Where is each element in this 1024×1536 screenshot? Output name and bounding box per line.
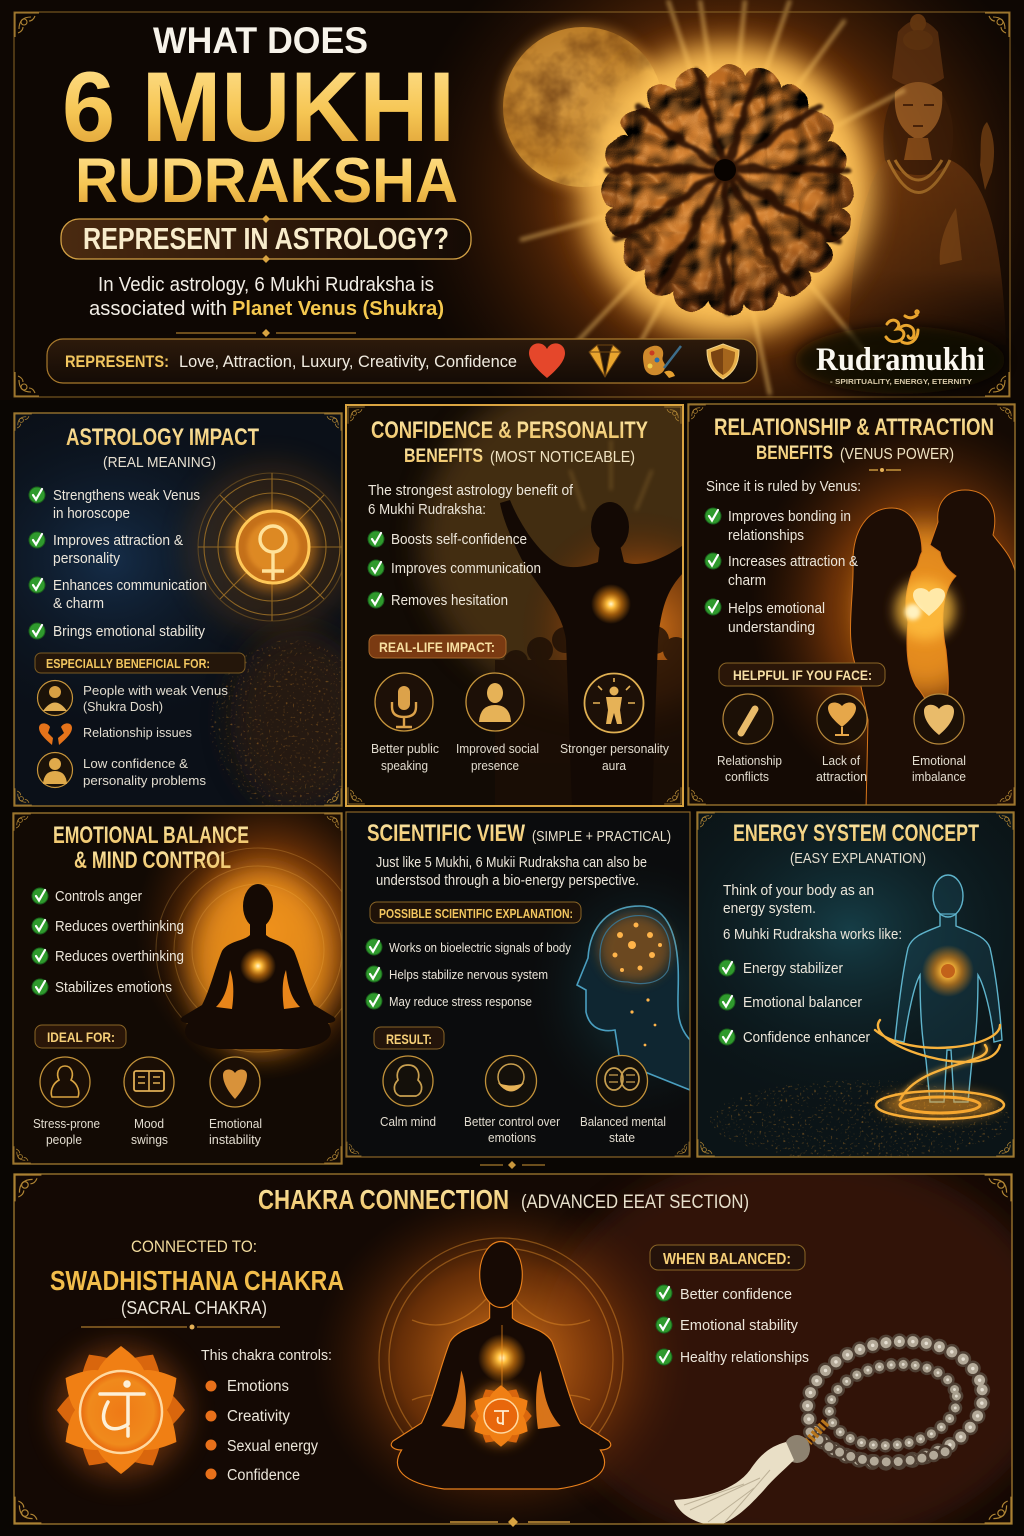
checklist: Improves attraction & <box>53 533 183 549</box>
checklist: Improves communication <box>391 561 541 577</box>
intro text: associated with <box>89 298 227 320</box>
logo <box>795 311 1005 394</box>
bead grooves <box>607 72 847 312</box>
icon: lack of attraction <box>817 694 867 744</box>
checklist: & charm <box>53 596 104 612</box>
panel: relationship and attraction <box>688 404 1024 810</box>
heading: (VENUS POWER) <box>840 446 954 463</box>
audience labels: Mood <box>134 1116 164 1131</box>
checklist: charm <box>728 573 766 589</box>
audience labels: Stress-prone <box>33 1116 100 1131</box>
icon: stress-prone people <box>40 1057 90 1107</box>
chakra name block: (SACRAL CHAKRA) <box>121 1298 267 1318</box>
meditating silhouette <box>181 884 335 1049</box>
energy body figure <box>895 875 1002 1102</box>
heading: & MIND CONTROL <box>74 847 231 874</box>
result labels: Better control over <box>464 1114 561 1129</box>
represents bar: REPRESENTS: <box>65 352 169 371</box>
icon: mood swings <box>124 1057 174 1107</box>
label: result <box>374 1027 444 1049</box>
balanced checklist: Better confidence <box>680 1286 792 1303</box>
label: especially beneficial for: ESPECIALLY BENEFICIAL FOR: <box>46 656 210 671</box>
icon: heart <box>529 343 565 378</box>
checklist: personality <box>53 551 121 567</box>
checklist: Increases attraction & <box>728 554 858 570</box>
intro text <box>89 274 444 320</box>
label: ideal for: IDEAL FOR: <box>47 1029 115 1045</box>
heading <box>714 414 994 464</box>
checklist: Confidence enhancer <box>743 1030 870 1046</box>
audience icons <box>40 1057 260 1107</box>
intro text: The strongest astrology benefit of <box>368 483 574 499</box>
moon <box>501 25 665 189</box>
intro text <box>376 855 647 889</box>
rudraksha bead <box>582 45 872 335</box>
represents bar: Love, Attraction, Luxury, Creativity, Confidence <box>179 352 517 371</box>
checklist <box>719 960 870 1046</box>
problem labels: attraction <box>816 769 867 784</box>
intro text: energy system. <box>723 901 816 917</box>
represents bar <box>47 339 757 383</box>
heading <box>733 820 979 867</box>
heading: (REAL MEANING) <box>103 454 216 471</box>
icon: relationship conflicts <box>723 694 773 744</box>
panel: hero header <box>14 0 1024 400</box>
checklist <box>29 487 207 640</box>
audience list <box>38 680 229 788</box>
checklist: Energy stabilizer <box>743 961 843 977</box>
audience list: People with weak Venus <box>83 683 229 698</box>
chakra controls list: Sexual energy <box>227 1438 318 1455</box>
intro text: Just like 5 Mukhi, 6 Mukii Rudraksha can also be <box>376 855 647 871</box>
checklist <box>32 888 184 996</box>
mala tassel <box>674 1422 826 1526</box>
brain head illustration <box>577 906 690 1090</box>
icon: person with weak Venus <box>38 680 72 716</box>
icon: balanced mental state <box>596 1056 648 1106</box>
checklist: Reduces overthinking <box>55 949 184 965</box>
decorative light rays <box>520 0 905 395</box>
result labels: Calm mind <box>380 1114 436 1129</box>
result labels <box>380 1114 666 1145</box>
label: when balanced <box>650 1245 805 1270</box>
impact labels: aura <box>602 758 627 773</box>
icon: diamond <box>589 345 621 377</box>
audience labels <box>33 1116 262 1147</box>
icon: swadhisthana chakra lotus <box>53 1342 189 1478</box>
checklist: Reduces overthinking <box>55 919 184 935</box>
heading: (SIMPLE + PRACTICAL) <box>532 829 671 845</box>
checklist <box>366 939 571 1009</box>
bead ridges <box>628 90 826 286</box>
intro text: Planet Venus (Shukra) <box>232 298 444 320</box>
icon: emotional imbalance <box>914 694 964 744</box>
label: helpful if you face <box>719 663 885 686</box>
couple silhouette <box>850 490 1016 810</box>
problem icons <box>723 694 964 744</box>
label: real-life impact: REAL-LIFE IMPACT: <box>379 639 495 655</box>
problem labels <box>717 753 966 784</box>
checklist: Removes hesitation <box>391 593 508 609</box>
impact labels: presence <box>471 758 519 773</box>
heading <box>371 417 648 467</box>
checklist: Enhances communication <box>53 578 207 594</box>
intro text <box>723 883 902 943</box>
intro text: 6 Muhki Rudraksha works like: <box>723 927 902 943</box>
checklist <box>368 531 541 609</box>
result icons <box>383 1056 648 1106</box>
audience labels: people <box>46 1132 82 1147</box>
title: WHAT DOES <box>153 20 368 61</box>
logo: Rudramukhi <box>816 342 985 378</box>
heading: BENEFITS <box>756 443 833 464</box>
crowd silhouettes <box>495 626 682 729</box>
goddess Venus figure <box>848 14 1006 345</box>
checklist: Helps emotional <box>728 601 825 617</box>
heading <box>66 424 259 471</box>
checklist: Works on bioelectric signals of body <box>389 940 571 955</box>
heading <box>53 822 249 874</box>
result labels: emotions <box>488 1130 536 1145</box>
checklist: Brings emotional stability <box>53 624 206 640</box>
title <box>66 27 456 202</box>
intro text: In Vedic astrology, 6 Mukhi Rudraksha is <box>98 274 434 296</box>
intro text: Think of your body as an <box>723 883 874 899</box>
panel: confidence and personality <box>345 404 684 807</box>
panel: energy system concept <box>696 811 1015 1158</box>
checklist: relationships <box>728 528 804 544</box>
chakra controls list: Confidence <box>227 1467 300 1484</box>
label: possible scientific explanation <box>370 902 581 923</box>
golden energy swirl <box>875 1020 1004 1119</box>
impact labels: Improved social <box>456 741 539 756</box>
header frame <box>14 12 1010 397</box>
balanced checklist: Healthy relationships <box>680 1349 809 1366</box>
heading: (EASY EXPLANATION) <box>790 850 926 867</box>
panel: astrology impact <box>13 412 343 807</box>
audience labels: swings <box>131 1132 168 1147</box>
icon: relationship issues <box>39 723 72 745</box>
icon: calm mind <box>383 1056 433 1106</box>
audience labels: instability <box>209 1132 261 1147</box>
crystal mala beads <box>800 1330 990 1474</box>
audience labels: Emotional <box>209 1116 262 1131</box>
intro text <box>368 483 574 518</box>
chakra name block <box>50 1237 344 1318</box>
checklist: Stabilizes emotions <box>55 980 172 996</box>
heading: (MOST NOTICEABLE) <box>490 449 635 466</box>
meditating figure with chakra <box>391 1242 611 1489</box>
subtitle pill: REPRESENT IN ASTROLOGY? <box>83 221 449 256</box>
chakra controls list: Emotions <box>227 1378 289 1395</box>
logo: - SPIRITUALITY, ENERGY, ETERNITY <box>830 379 972 386</box>
icon: low confidence <box>38 752 72 788</box>
checklist: Strengthens weak Venus <box>53 488 200 504</box>
zodiac wheel with Venus symbol <box>187 462 357 632</box>
label: helpful if you face: HELPFUL IF YOU FACE: <box>733 667 872 683</box>
panel: chakra connection <box>14 1150 1024 1536</box>
checklist <box>705 508 858 636</box>
checklist: May reduce stress response <box>389 994 532 1009</box>
panel: scientific view <box>345 811 691 1158</box>
checklist: Controls anger <box>55 889 142 905</box>
checklist: understanding <box>728 620 815 636</box>
icon: om <box>886 311 918 343</box>
icon: personality aura <box>584 674 644 732</box>
heading: ASTROLOGY IMPACT <box>66 424 259 451</box>
problem labels: Emotional <box>912 753 966 768</box>
icon: palette <box>643 346 681 378</box>
title: 6 MUKHI <box>62 51 455 162</box>
label: when balanced: WHEN BALANCED: <box>663 1251 791 1268</box>
balanced checklist <box>656 1285 809 1366</box>
halo rings <box>378 1237 624 1434</box>
checklist: Emotional balancer <box>743 995 862 1011</box>
audience list: (Shukra Dosh) <box>83 699 163 714</box>
label: real-life impact <box>369 635 506 658</box>
heading: CHAKRA CONNECTION <box>258 1184 509 1215</box>
result labels: Balanced mental <box>580 1114 666 1129</box>
chakra name block: CONNECTED TO: <box>131 1237 257 1256</box>
impact icons <box>375 673 644 732</box>
checklist: Improves bonding in <box>728 509 851 525</box>
audience list: Low confidence & <box>83 756 188 771</box>
heading: (ADVANCED EEAT SECTION) <box>521 1192 749 1213</box>
icon: control over emotions <box>486 1056 536 1106</box>
label: result: RESULT: <box>386 1031 432 1047</box>
chakra controls list <box>201 1347 332 1484</box>
heading <box>258 1184 749 1215</box>
chakra controls list: Creativity <box>227 1408 290 1425</box>
panel: emotional balance <box>12 812 343 1165</box>
icon: emotional instability <box>210 1057 260 1107</box>
title: RUDRAKSHA <box>75 146 458 216</box>
impact labels: speaking <box>381 758 428 773</box>
heading: EMOTIONAL BALANCE <box>53 822 249 849</box>
icon: social presence <box>466 673 524 731</box>
icon: shield <box>707 344 739 379</box>
impact labels: Better public <box>371 741 439 756</box>
raised-arms silhouette <box>500 500 682 738</box>
icon: microphone <box>375 673 433 731</box>
heading: SCIENTIFIC VIEW <box>367 820 525 847</box>
subtitle pill <box>61 215 471 263</box>
problem labels: Relationship <box>717 753 782 768</box>
checklist: in horoscope <box>53 506 130 522</box>
heading: CONFIDENCE & PERSONALITY <box>371 417 648 444</box>
label: ideal for <box>35 1025 126 1048</box>
heading: BENEFITS <box>404 446 483 467</box>
problem labels: imbalance <box>912 769 966 784</box>
audience list: personality problems <box>83 773 207 788</box>
problem labels: conflicts <box>725 769 769 784</box>
intro text: Since it is ruled by Venus: <box>706 479 861 495</box>
impact labels: Stronger personality <box>560 741 669 756</box>
heading <box>367 820 671 847</box>
result labels: state <box>609 1130 635 1145</box>
balanced checklist: Emotional stability <box>680 1317 798 1334</box>
intro text: understsod through a bio-energy perspective. <box>376 873 639 889</box>
label: possible scientific explanation: POSSIBLE SCIENTIFIC EXPLANATION: <box>379 906 573 921</box>
problem labels: Lack of <box>822 753 860 768</box>
chakra controls list: This chakra controls: <box>201 1347 332 1364</box>
impact labels <box>371 741 669 773</box>
intro text: 6 Mukhi Rudraksha: <box>368 502 486 518</box>
audience list: Relationship issues <box>83 725 192 740</box>
glowing heart <box>895 580 955 640</box>
checklist: Helps stabilize nervous system <box>389 967 548 982</box>
chakra name block: SWADHISTHANA CHAKRA <box>50 1265 344 1296</box>
checklist: Boosts self-confidence <box>391 532 527 548</box>
